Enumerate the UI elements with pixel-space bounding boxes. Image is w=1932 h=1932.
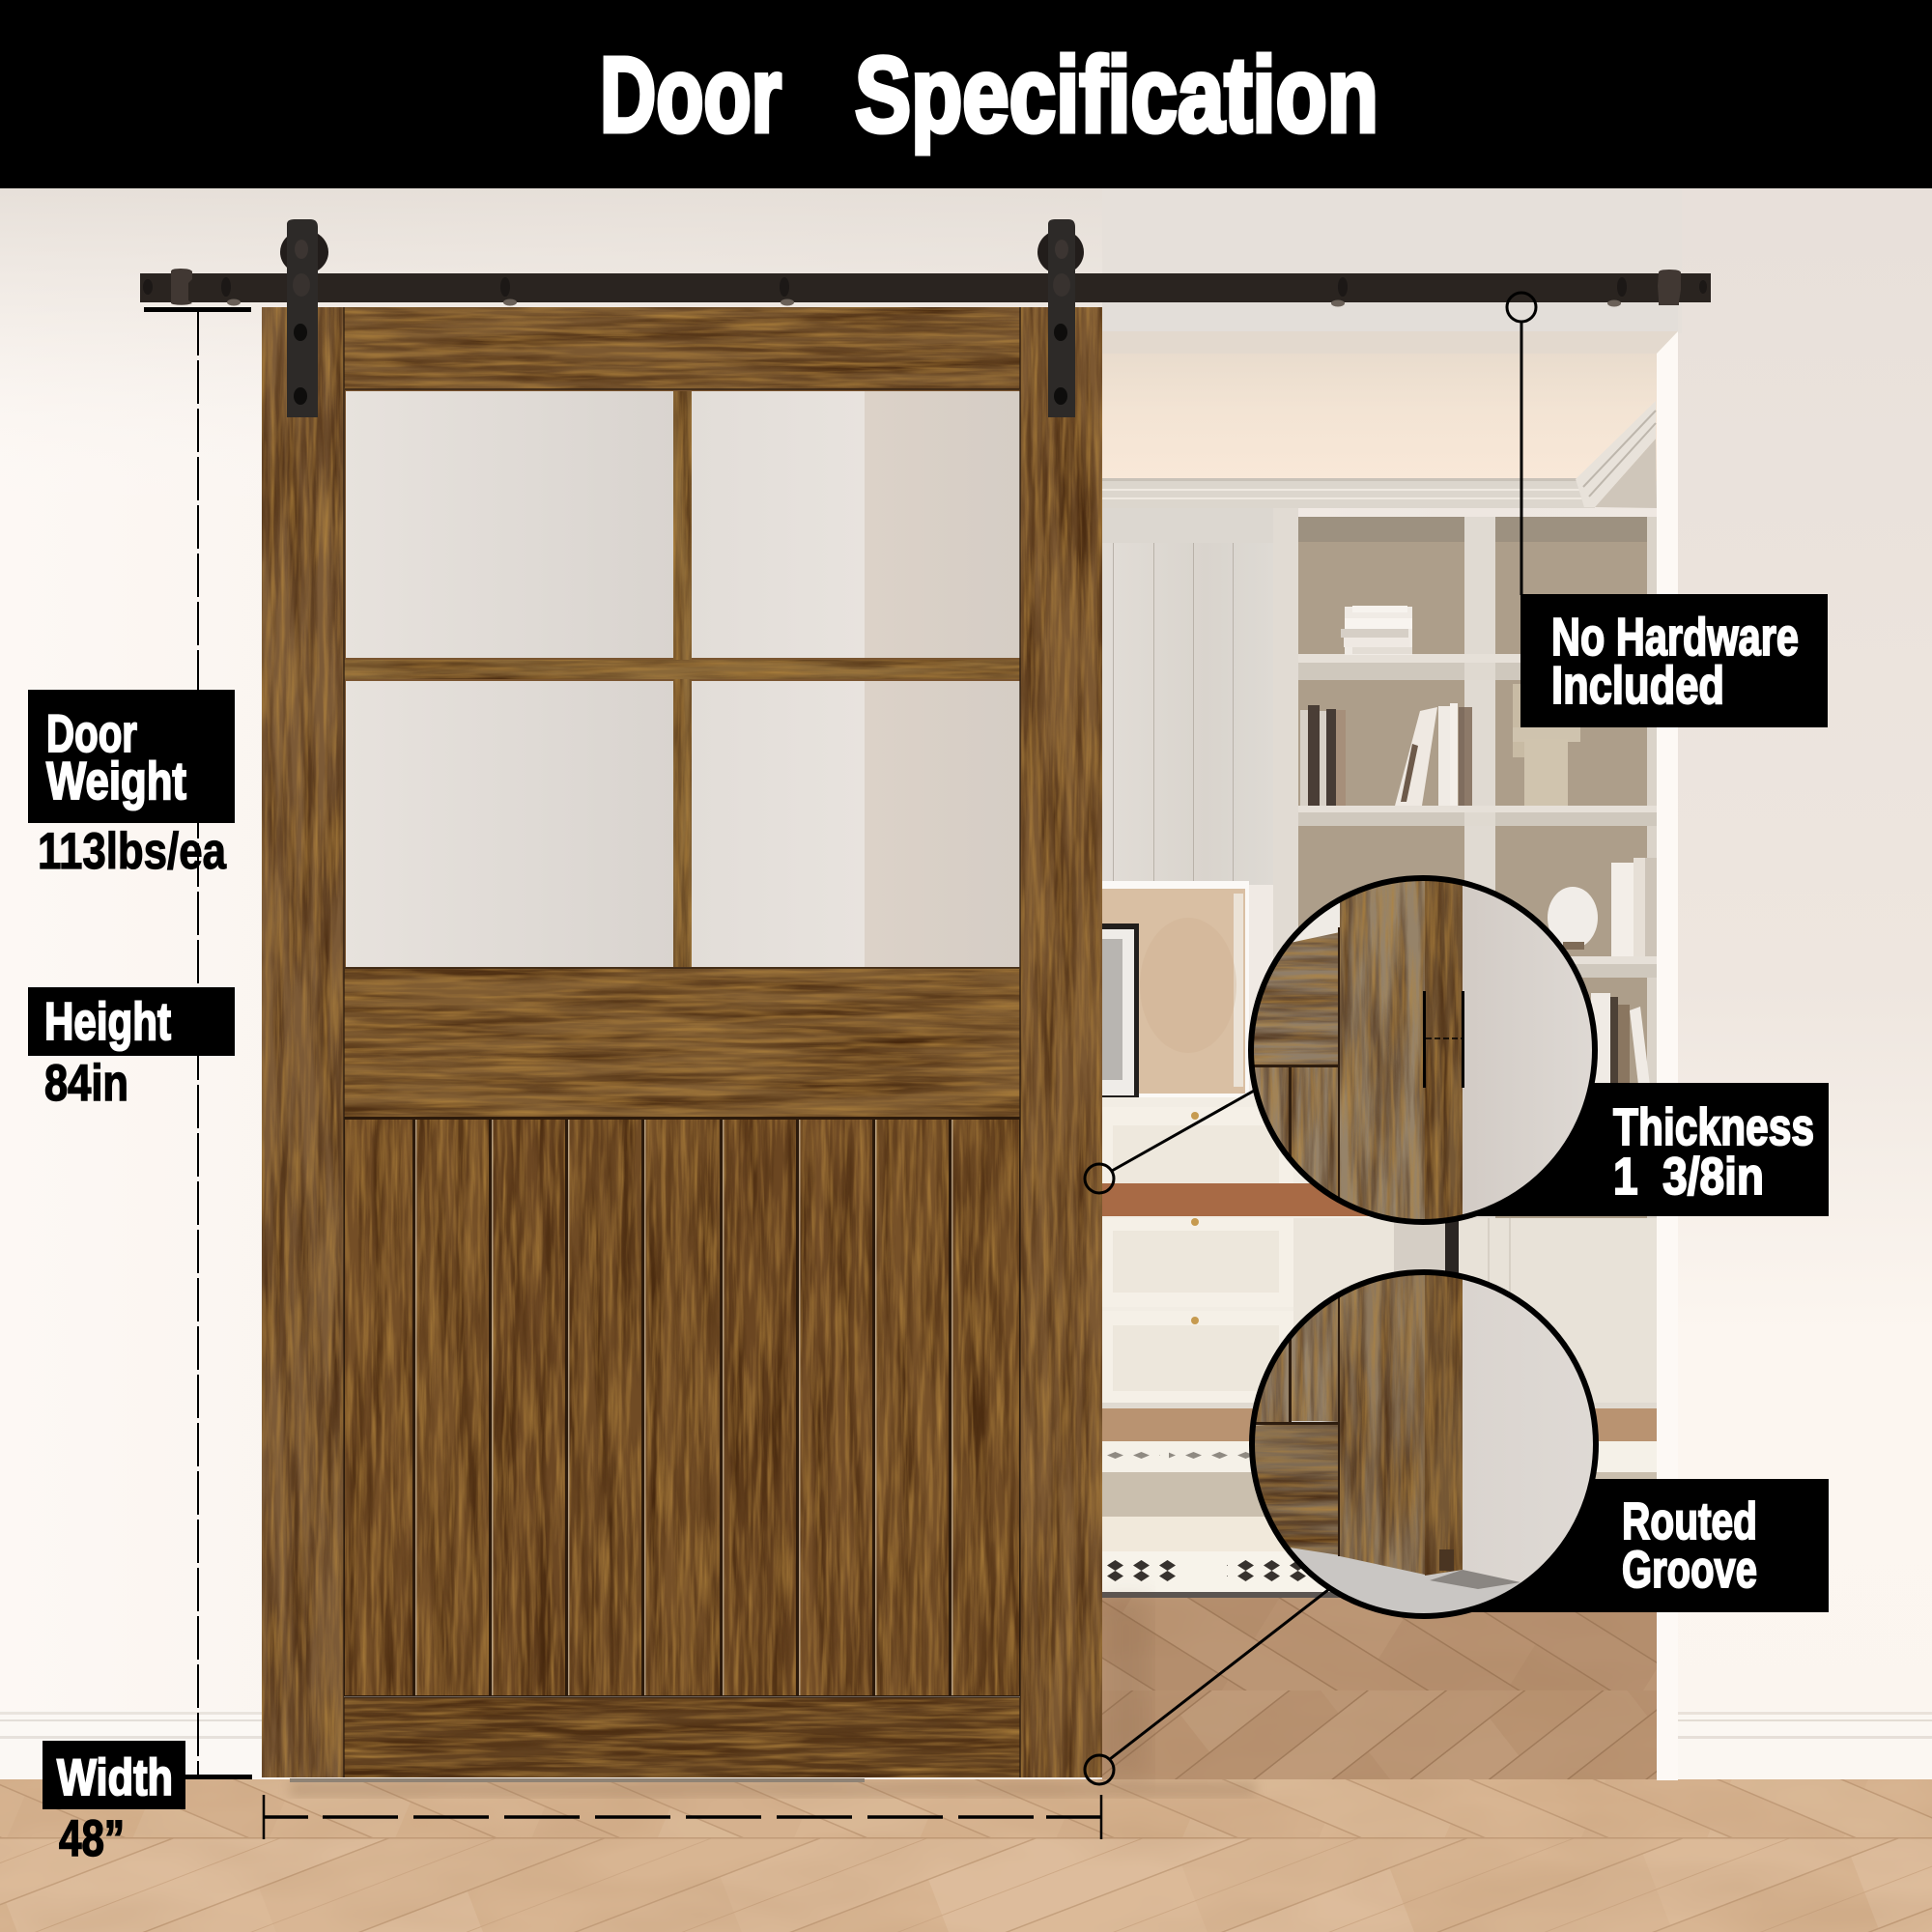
label: width — [43, 1741, 252, 1867]
glass panes — [344, 389, 1020, 969]
door header and reveal — [1102, 302, 1678, 1780]
label: height: 84in — [44, 1055, 128, 1112]
interior room seen through opening — [1102, 302, 1678, 1780]
door left stile — [262, 307, 344, 1777]
callout: routed groove: Groove — [1622, 1541, 1757, 1599]
title: Door — [600, 36, 781, 155]
crown moulding — [1102, 401, 1657, 508]
left hanger — [280, 219, 328, 417]
label: door weight: Door — [46, 703, 137, 763]
track rail — [140, 273, 1711, 302]
label: width: 48” — [59, 1810, 125, 1867]
callout: no hardware included — [1507, 293, 1828, 727]
door middle rail — [344, 968, 1020, 1117]
hallway floor — [1102, 1408, 1657, 1443]
barn door track hardware — [140, 219, 1711, 417]
header banner — [0, 0, 1932, 188]
window muntins — [344, 391, 1020, 967]
callout: no hardware included: Included — [1551, 655, 1724, 715]
sculpture — [1513, 684, 1580, 806]
baseboards — [0, 1711, 1932, 1779]
floor guide — [290, 1778, 865, 1782]
title — [600, 36, 1378, 155]
callout: thickness — [1085, 1083, 1829, 1216]
width dimension line — [264, 1795, 1101, 1839]
right stopper — [1658, 270, 1681, 305]
label: width: Width — [57, 1749, 173, 1806]
wooden desk top — [1102, 1183, 1382, 1216]
detail circle: routed groove — [1246, 1270, 1604, 1620]
callout: routed groove — [1085, 1479, 1829, 1784]
books left — [1300, 705, 1346, 806]
label: door weight: Weight — [46, 751, 186, 810]
hallway floor foreground — [1102, 1598, 1657, 1779]
label: height — [28, 987, 235, 1112]
callout: thickness: Thickness — [1613, 1098, 1814, 1156]
books stack — [1341, 606, 1412, 655]
track bolts — [143, 277, 1707, 307]
sliding barn door — [262, 307, 1102, 1782]
panelled wall — [1102, 508, 1298, 1204]
vase and books — [1548, 858, 1657, 1102]
door bottom rail — [344, 1697, 1020, 1777]
bookcase — [1298, 517, 1657, 1218]
callout: no hardware included: No Hardware — [1551, 607, 1799, 667]
title: Specification — [855, 36, 1378, 155]
height dimension line — [144, 307, 251, 1777]
plank panel — [344, 1117, 1020, 1696]
rug — [1102, 1441, 1657, 1600]
framed art — [1102, 881, 1249, 1100]
door right stile — [1020, 307, 1102, 1777]
detail circle: door thickness — [1246, 874, 1604, 1227]
books right — [1395, 703, 1472, 806]
callout: routed groove: Routed — [1622, 1492, 1757, 1550]
cabinets — [1102, 1097, 1657, 1408]
label: door weight: 113lbs/ea — [38, 823, 226, 880]
ceiling — [1102, 354, 1657, 481]
callout: thickness: 1 3/8in — [1613, 1148, 1764, 1206]
left stopper — [171, 269, 192, 305]
right hanger — [1037, 219, 1084, 417]
parquet floor — [0, 1779, 1932, 1932]
label: height: Height — [44, 991, 171, 1051]
door top rail — [344, 307, 1020, 389]
label: door weight — [28, 690, 235, 880]
